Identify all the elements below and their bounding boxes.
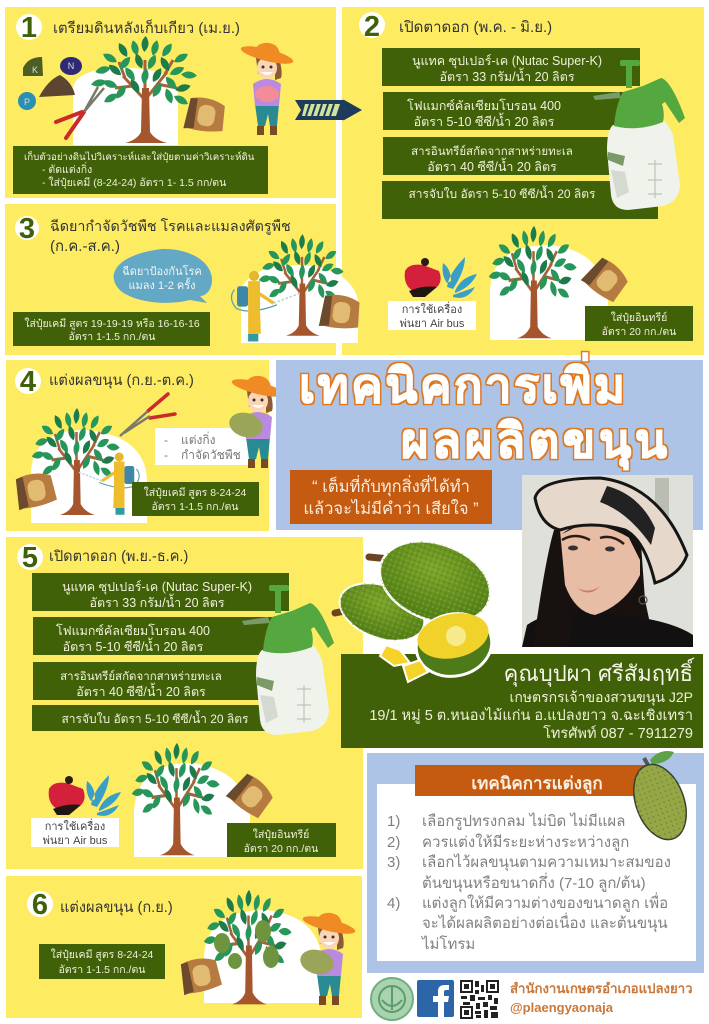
title: เทคนิคการเพิ่ม	[299, 352, 625, 412]
panel: step 3 spraying	[5, 204, 336, 355]
bar 2: โฟแมกซ์คัลเซียมโบรอน 400	[407, 98, 561, 113]
text bar: - ตัดแต่งกิ่ง	[42, 162, 92, 176]
bar 2: อัตรา 5-10 ซีซี/น้ำ 20 ลิตร	[414, 112, 555, 129]
white note	[155, 428, 255, 465]
bar 2	[383, 92, 640, 130]
icon: jackfruits	[332, 527, 502, 683]
panel: title	[276, 352, 703, 530]
number 1	[16, 12, 42, 44]
bar 3	[33, 662, 283, 700]
white note: แต่งกิ่ง	[181, 431, 216, 447]
heading step 6: แต่งผลขนุน (ก.ย.)	[60, 900, 173, 916]
heading step 5: เปิดตาดอก (พ.ย.-ธ.ค.)	[49, 549, 188, 565]
text bar: อัตรา 1-1.5 กก./ตน	[69, 331, 155, 343]
numbered list: ไม่โทรม	[421, 935, 475, 953]
contact panel	[341, 654, 703, 748]
heading step 2: เปิดตาดอก (พ.ค. - มิ.ย.)	[399, 19, 552, 36]
text bar	[39, 944, 165, 979]
panel: step 2 flower bud	[342, 7, 704, 355]
numbered list: เลือกไว้ผลขนุนตามความเหมาะสมของ	[422, 853, 671, 872]
panel: step 6 fruit thinning	[6, 876, 362, 1018]
icon: farmer with jackfruit	[297, 913, 357, 1005]
label air bus: พ่นยา Air bus	[400, 318, 465, 330]
bar 4: สารจับใบ อัตรา 5-10 ซีซี/น้ำ 20 ลิตร	[408, 185, 596, 201]
number 6	[27, 889, 53, 921]
text bar: อัตรา 1-1.5 กก./ตน	[152, 501, 238, 513]
phone: โทรศัพท์ 087 - 7911279	[543, 724, 693, 742]
label air bus	[31, 818, 119, 847]
heading box	[415, 765, 650, 796]
icon: farmer with jackfruit	[226, 376, 286, 468]
white note: -	[164, 433, 168, 447]
numbered list: ควรแต่งให้มีระยะห่างระหว่างลูก	[422, 833, 629, 851]
white arch	[31, 430, 147, 523]
numbered list: เลือกรูปทรงกลม ไม่บิด ไม่มีแผล	[422, 812, 625, 830]
label air bus: พ่นยา Air bus	[43, 835, 108, 847]
icon: air bus sprayer	[49, 775, 121, 816]
text bar: อัตรา 20 กก./ตน	[244, 843, 318, 855]
bar 4: สารจับใบ อัตรา 5-10 ซีซี/น้ำ 20 ลิตร	[61, 710, 249, 726]
number 1: 1	[21, 12, 37, 44]
number 2	[359, 11, 385, 43]
icon: arch, tree and sprayer of step 3	[231, 234, 362, 343]
bar 1: อัตรา 33 กรัม/น้ำ 20 ลิตร	[439, 67, 575, 84]
bar 3: สารอินทรีย์สกัดจากสาหร่ายทะเล	[411, 144, 573, 158]
heading step 3: ฉีดยากำจัดวัชพืช โรคและแมลงศัตรูพืช	[50, 218, 291, 235]
panel: step 4 fruit thinning	[6, 360, 286, 531]
callout bubble: แมลง 1-2 ครั้ง	[128, 277, 196, 292]
icon: tree	[31, 408, 120, 515]
number 6: 6	[32, 889, 48, 921]
icon: fertilizer sack	[183, 95, 228, 135]
label air bus: การใช้เครื่อง	[45, 818, 105, 833]
heading step 4: แต่งผลขนุน (ก.ย.-ต.ค.)	[49, 373, 194, 389]
photo: farmer portrait	[522, 475, 693, 647]
callout bubble	[114, 249, 212, 303]
bar 1	[32, 573, 289, 611]
label air bus	[388, 301, 476, 330]
white arch	[490, 245, 608, 340]
numbered list: 3)	[387, 854, 400, 871]
numbered list: จะได้ผลผลิตอย่างต่อเนื่อง และต้นขนุน	[422, 912, 668, 933]
bar 2: โฟแมกซ์คัลเซียมโบรอน 400	[56, 623, 210, 638]
icon: tree	[131, 743, 220, 855]
number 4: 4	[20, 366, 36, 398]
bar 1: นูแทค ซุปเปอร์-เค (Nutac Super-K)	[62, 580, 252, 595]
numbered list: ต้นขนุนหรือขนาดกึ่ง (7-10 ลูก/ต้น)	[422, 872, 646, 893]
numbered list	[387, 812, 671, 953]
text bar	[227, 823, 336, 857]
bar 4	[382, 181, 658, 219]
bar 2: อัตรา 5-10 ซีซี/น้ำ 20 ลิตร	[63, 637, 204, 654]
label air bus: การใช้เครื่อง	[402, 301, 462, 316]
heading step 1: เตรียมดินหลังเก็บเกียว (เม.ย.)	[53, 18, 240, 37]
text bar	[585, 306, 693, 341]
bar 1: อัตรา 33 กรัม/น้ำ 20 ลิตร	[89, 593, 225, 610]
number 3: 3	[19, 213, 35, 245]
icon: tree	[91, 36, 197, 143]
icon: tree with fruits	[203, 890, 292, 1004]
icon: tree	[488, 226, 577, 338]
icon: facebook	[417, 980, 454, 1017]
text bar: - ใส่ปุ๋ยเคมี (8-24-24) อัตรา 1- 1.5 กก/ตน	[42, 176, 226, 189]
text bar	[13, 146, 268, 194]
text bar: ใส่ปุ๋ยเคมี สูตร 19-19-19 หรือ 16-16-16	[24, 317, 200, 330]
address: 19/1 หมู่ 5 ต.หนองไม้แก่น อ.แปลงยาว จ.ฉะเชิงเทรา	[369, 706, 693, 724]
panel: step 5 flower bud	[6, 537, 363, 869]
icon: sprayer worker	[78, 452, 139, 515]
icon: NPK fertilizer and soil: K	[32, 65, 38, 75]
text bar	[132, 482, 259, 516]
panel: step 3 spraying: (ก.ค.-ส.ค.)	[50, 238, 120, 255]
text bar: อัตรา 1-1.5 กก./ตน	[59, 964, 145, 976]
text bar: ใส่ปุ๋ยเคมี สูตร 8-24-24	[51, 948, 154, 961]
number 5: 5	[22, 542, 38, 574]
bar 3	[383, 137, 640, 175]
icon: NPK fertilizer and soil: P	[24, 97, 30, 107]
text bar: ใส่ปุ๋ยอินทรีย์	[611, 311, 667, 324]
numbered list: แต่งลูกให้มีความต่างของขนาดลูก เพื่อ	[422, 892, 668, 912]
text bar: เก็บตัวอย่างดินไปวิเคราะห์และใส่ปุ๋ยตามค่าวิเคราะห์ดิน	[24, 150, 255, 163]
icon: spray bottle	[242, 585, 334, 735]
bar 3: สารอินทรีย์สกัดจากสาหร่ายทะเล	[60, 669, 222, 683]
number 3	[15, 213, 39, 245]
icon: sack	[178, 955, 223, 995]
role: เกษตรกรเจ้าของสวนขนุน J2P	[510, 689, 693, 706]
icon: air bus sprayer	[405, 257, 477, 298]
icon: sack	[581, 254, 632, 305]
panel: fruit thinning technique	[367, 751, 704, 973]
office name: สำนักงานเกษตรอำเภอแปลงยาว	[510, 981, 693, 996]
icon: shears	[120, 394, 175, 436]
white arch	[204, 910, 322, 1003]
heading box: เทคนิคการแต่งลูก	[471, 774, 603, 795]
icon: NPK fertilizer and soil: N	[68, 61, 74, 71]
icon: sack	[226, 770, 277, 821]
footer	[371, 978, 693, 1020]
icon: spray bottle	[593, 60, 685, 210]
quote box	[290, 470, 492, 524]
quote box: “ เต็มที่กับทุกสิ่งที่ได้ทำ	[312, 475, 470, 497]
text bar	[13, 312, 210, 346]
icon: NPK fertilizer and soil	[18, 57, 82, 110]
white arch	[134, 763, 250, 857]
text bar: ใส่ปุ๋ยอินทรีย์	[253, 828, 309, 841]
bar 2	[33, 617, 283, 655]
title	[299, 352, 667, 470]
bar 3: อัตรา 40 ซีซี/น้ำ 20 ลิตร	[427, 157, 557, 174]
numbered list: 1)	[387, 813, 400, 830]
icon: QR code	[461, 981, 498, 1018]
numbered list: 2)	[387, 834, 400, 851]
bar 1: นูแทค ซุปเปอร์-เค (Nutac Super-K)	[412, 54, 602, 69]
bar 1	[382, 48, 640, 86]
social handle: @plaengyaonaja	[510, 1000, 614, 1015]
number 2: 2	[364, 11, 380, 43]
icon: department seal	[371, 978, 413, 1020]
white note: -	[164, 448, 168, 462]
number 4	[15, 366, 41, 398]
text bar: ใส่ปุ๋ยเคมี สูตร 8-24-24	[144, 486, 247, 499]
title: ผลผลิตขนุน	[401, 414, 667, 470]
icon: arrow between step 1 and step 2	[295, 97, 362, 123]
bar 3: อัตรา 40 ซีซี/น้ำ 20 ลิตร	[76, 682, 206, 699]
quote box: แล้วจะไม่มีคำว่า เสียใจ ”	[303, 499, 479, 518]
white arch	[73, 68, 178, 145]
callout bubble: ฉีดยาป้องกันโรค	[122, 264, 202, 278]
white note: กำจัดวัชพืช	[181, 448, 241, 462]
icon: farmer with piggy bank	[239, 43, 295, 135]
bar 4	[32, 705, 277, 731]
text bar: อัตรา 20 กก./ตน	[602, 326, 676, 338]
panel: step 1 soil preparation	[5, 7, 336, 198]
icon: pruning shears	[56, 87, 104, 138]
icon: jackfruit	[624, 751, 696, 847]
name: คุณบุปผา ศรีสัมฤทธิ์	[504, 658, 695, 687]
numbered list: 4)	[387, 895, 400, 912]
icon: sack	[13, 470, 58, 510]
number 5	[17, 542, 43, 574]
